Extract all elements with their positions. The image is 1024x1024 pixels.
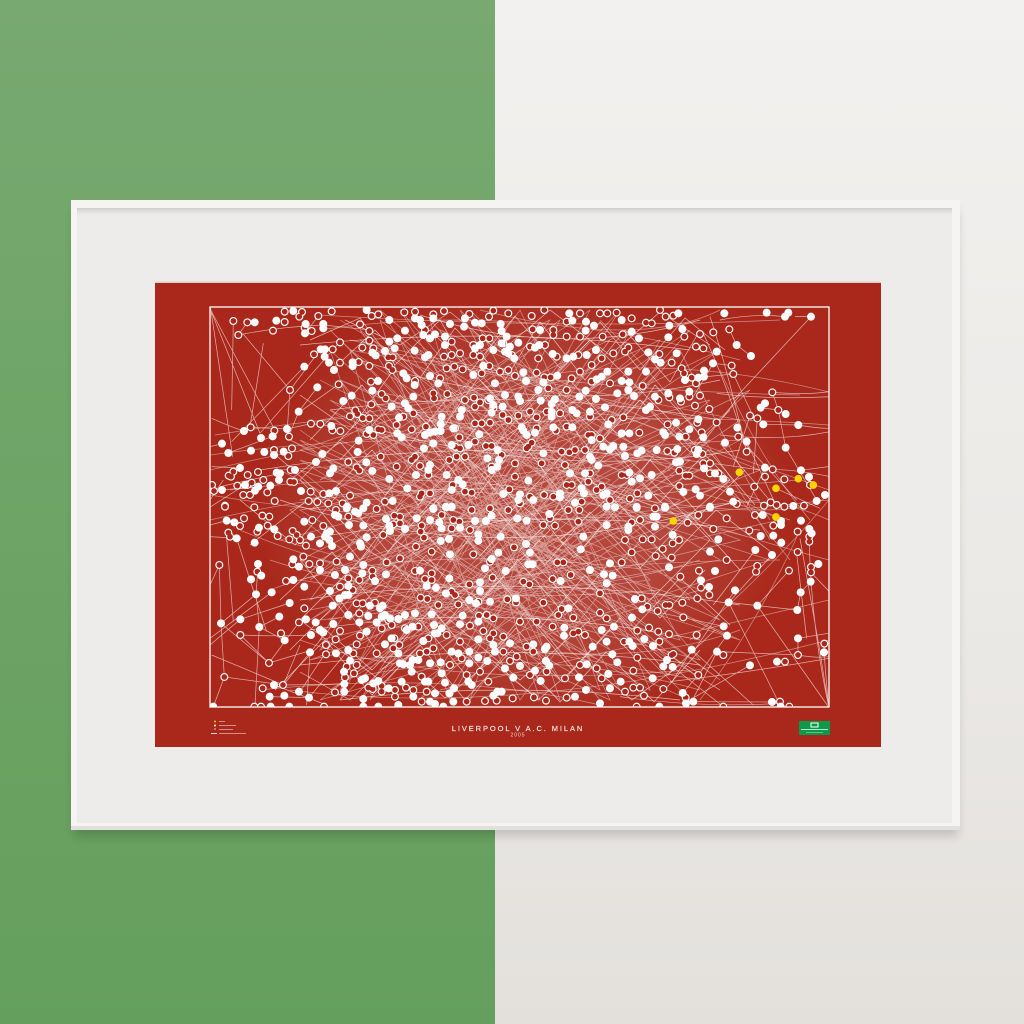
hollow pass markers — [212, 310, 824, 707]
green wall — [0, 0, 495, 1024]
dense area glow — [288, 310, 762, 706]
sparse top-left lines — [210, 308, 370, 507]
goal markers in yellow — [673, 472, 813, 521]
white wall — [495, 0, 1024, 1024]
year: 2005 — [510, 732, 526, 738]
solid white pass markers — [213, 310, 825, 707]
pass lines — [210, 308, 833, 707]
pitch outline — [210, 307, 829, 707]
title: LIVERPOOL V A.C. MILAN — [452, 724, 584, 733]
sparse right-top lines — [693, 316, 830, 510]
sparse left-bottom lines — [210, 521, 348, 707]
sparse right-bottom lines — [620, 530, 829, 707]
pass map chart — [209, 306, 830, 708]
frame shadow — [74, 210, 958, 836]
poster panel — [155, 282, 881, 747]
brand badge — [799, 721, 830, 735]
white picture frame — [71, 200, 960, 830]
legend — [211, 720, 246, 734]
